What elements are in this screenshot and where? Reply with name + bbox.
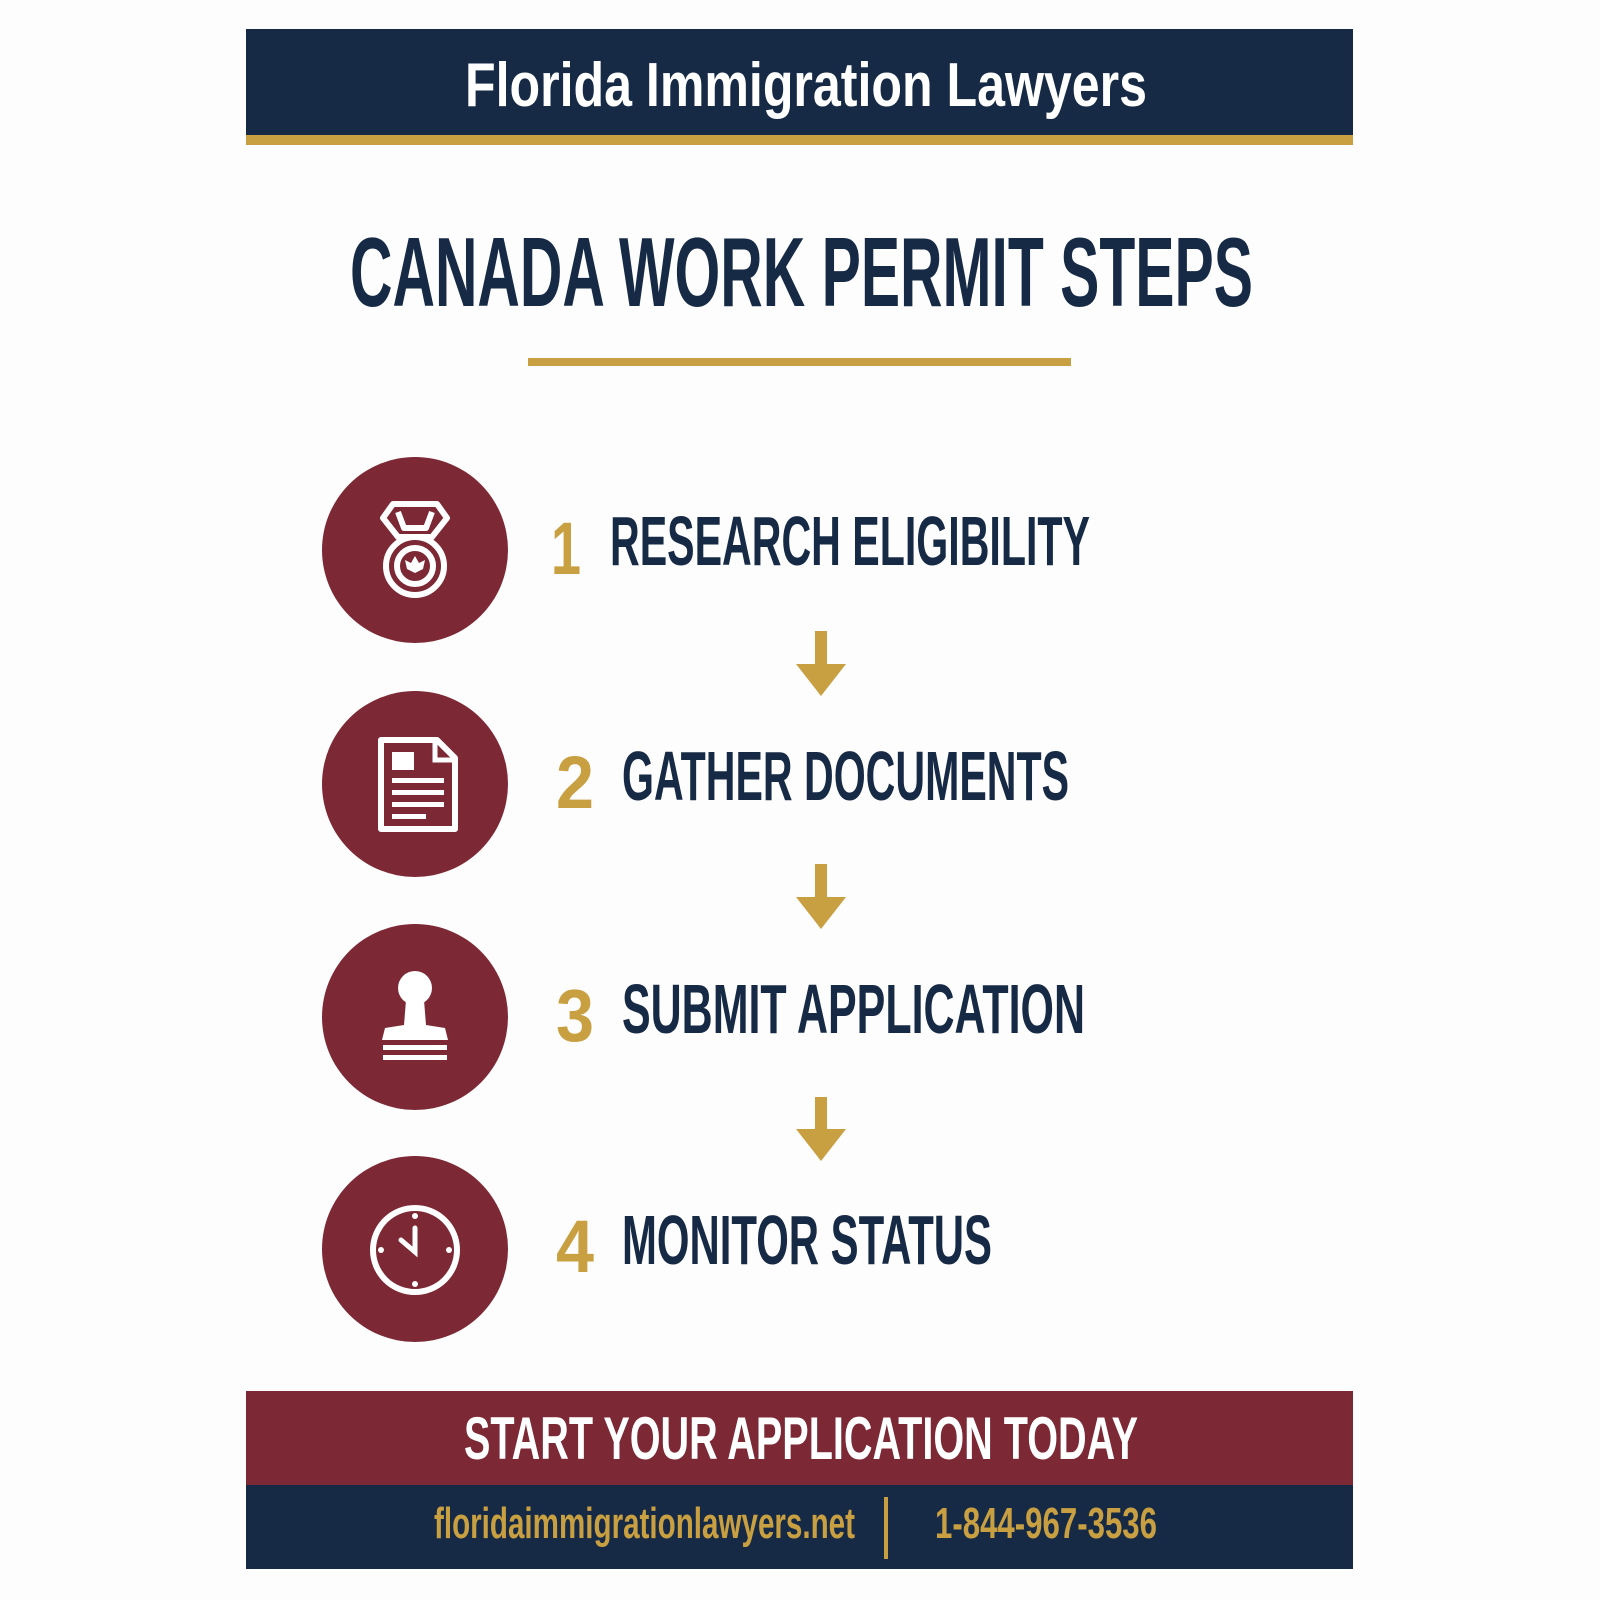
arrow 1 <box>796 631 846 696</box>
step label 3: SUBMIT APPLICATION <box>622 970 1085 1048</box>
step 1 <box>322 457 1090 643</box>
icon: clock <box>322 1156 508 1342</box>
CTA text: START YOUR APPLICATION TODAY <box>464 1405 1138 1472</box>
CTA banner <box>246 1391 1353 1486</box>
step number 1: 1 <box>551 507 581 590</box>
header title: Florida Immigration Lawyers <box>465 51 1147 120</box>
icon: document <box>322 691 508 877</box>
step label 4: MONITOR STATUS <box>622 1201 992 1279</box>
step label 2: GATHER DOCUMENTS <box>622 737 1069 815</box>
step number 2: 2 <box>556 741 594 824</box>
website: floridaimmigrationlawyers.net <box>434 1499 855 1548</box>
step number 3: 3 <box>556 974 594 1057</box>
phone: 1-844-967-3536 <box>935 1499 1157 1548</box>
step label 1: RESEARCH ELIGIBILITY <box>610 502 1090 580</box>
footer contact bar <box>246 1485 1353 1569</box>
arrow 2 <box>796 864 846 929</box>
step number 4: 4 <box>556 1205 594 1288</box>
icon: stamp <box>322 924 508 1110</box>
step 4 <box>322 1156 992 1342</box>
arrow 3 <box>796 1097 846 1161</box>
icon: medal <box>322 457 508 643</box>
title underline <box>528 358 1071 366</box>
header bar <box>246 29 1353 145</box>
step 3 <box>322 924 1085 1110</box>
step 2 <box>322 691 1069 877</box>
